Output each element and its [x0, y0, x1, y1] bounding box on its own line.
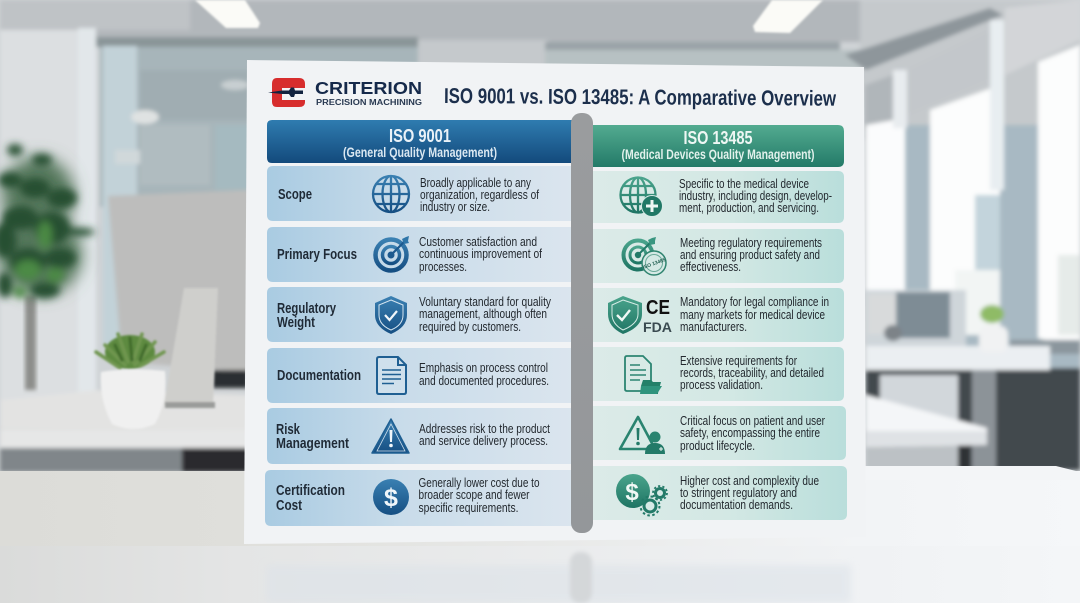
row: Risk Management: [585, 406, 846, 460]
row: Primary Focus: effectiveness.: [680, 260, 741, 274]
row: Documentation: Documentation: [277, 368, 361, 384]
row: Scope: [267, 166, 575, 221]
row: Certification Cost: Higher cost and complexity due: [680, 474, 819, 488]
row: Scope: organization, regardless of: [420, 188, 539, 202]
heading: ISO 9001: [267, 120, 575, 163]
foliage plant: [0, 144, 95, 390]
icon: shield with CE and FDA marks: CE: [646, 297, 670, 319]
icon: shield with check: [375, 296, 407, 334]
row: Scope: Broadly applicable to any: [420, 176, 532, 190]
row: Scope: Specific to the medical device: [679, 177, 809, 191]
row: Regulatory Weight: Regulatory: [277, 301, 336, 317]
row: Scope: industry or size.: [420, 200, 490, 214]
row: Primary Focus: [267, 227, 575, 282]
desk plant and pot: [96, 334, 166, 429]
title: ISO 9001 vs. ISO 13485: A Comparative Overview: [444, 84, 836, 111]
row: Certification Cost: documentation demands.: [680, 498, 793, 512]
panel: ISO 9001 column: [265, 120, 575, 526]
row: Primary Focus: Meeting regulatory requirements: [680, 236, 822, 250]
row: Risk Management: Addresses risk to the product: [419, 422, 550, 436]
icon: warning triangle with person: [620, 417, 665, 454]
heading: ISO 13485: (Medical Devices Quality Management): [622, 147, 814, 162]
heading: ISO 9001: ISO 9001: [389, 126, 451, 146]
icon: shield with CE and FDA marks: [608, 296, 672, 335]
row: Certification Cost: Certification: [276, 483, 345, 499]
row: Regulatory Weight: [585, 288, 844, 342]
row: Certification Cost: Generally lower cost due to: [418, 476, 540, 490]
icon: document with folder: [625, 356, 662, 394]
row: Documentation: records, traceability, and detailed: [680, 366, 824, 380]
row: Documentation: process validation.: [680, 378, 763, 392]
row: Certification Cost: [585, 466, 847, 520]
row: Risk Management: and service delivery process.: [419, 434, 548, 448]
panel: ISO 13485 column: [585, 125, 847, 520]
row: Regulatory Weight: many markets for medical device: [680, 308, 825, 322]
row: Documentation: and documented procedures.: [419, 374, 549, 388]
row: Regulatory Weight: Weight: [277, 315, 315, 331]
row: Risk Management: Critical focus on patient and user: [680, 414, 825, 428]
row: Scope: Scope: [278, 187, 312, 203]
row: Risk Management: Risk: [276, 422, 301, 438]
divider: central grey bar: [571, 113, 593, 533]
row: Scope: [585, 171, 844, 223]
row: Certification Cost: to stringent regulatory and: [680, 486, 797, 500]
icon: dollar coin: $: [384, 484, 398, 512]
monitor stand: [164, 288, 218, 408]
logo: Criterion Precision Machining: CRITERION: [315, 78, 422, 98]
row: Risk Management: Management: [276, 436, 349, 452]
row: Documentation: Emphasis on process control: [419, 361, 548, 375]
row: Documentation: Extensive requirements for: [680, 354, 797, 368]
icon: shield with CE and FDA marks: FDA: [643, 319, 672, 335]
row: Risk Management: safety, encompassing the entire: [680, 426, 820, 440]
row: Certification Cost: Cost: [276, 498, 302, 514]
icon: target with seal: ISO 13485: [642, 257, 667, 271]
icon: dollar coin with gears: $: [625, 479, 639, 506]
logo: Criterion Precision Machining: PRECISION MACHINING: [316, 98, 422, 107]
panel: comparison poster: [244, 60, 866, 544]
row: Regulatory Weight: Voluntary standard for quality: [419, 295, 552, 309]
icon: target with seal: [624, 237, 667, 275]
heading: ISO 13485: ISO 13485: [684, 128, 752, 148]
row: Regulatory Weight: Mandatory for legal compliance in: [680, 295, 829, 309]
row: Primary Focus: Customer satisfaction and: [419, 235, 537, 249]
right side: [860, 0, 1080, 140]
icon: globe: [373, 176, 409, 212]
icon: globe with plus: [620, 178, 662, 216]
row: Regulatory Weight: [267, 287, 575, 342]
row: Risk Management: product lifecycle.: [680, 439, 755, 453]
row: Primary Focus: Primary Focus: [277, 247, 357, 263]
row: Certification Cost: specific requirements.: [418, 501, 518, 515]
heading: ISO 13485: [585, 125, 844, 167]
row: Documentation: [267, 348, 575, 403]
row: Certification Cost: [265, 470, 575, 526]
logo: Criterion Precision Machining: [268, 78, 422, 107]
row: Regulatory Weight: required by customers.: [419, 320, 521, 334]
icon: warning triangle: [372, 419, 409, 453]
icon: dollar coin: [373, 479, 409, 515]
ceiling lights: [195, 0, 823, 33]
heading: ISO 9001: (General Quality Management): [343, 145, 497, 160]
icon: target: [376, 236, 409, 270]
left monitor and desk: [108, 190, 250, 372]
row: Regulatory Weight: manufacturers.: [680, 320, 747, 334]
row: Documentation: [585, 347, 844, 401]
row: Primary Focus: continuous improvement of: [419, 247, 542, 261]
row: Primary Focus: processes.: [419, 260, 467, 274]
poster sheet: [244, 60, 866, 544]
row: Primary Focus: and ensuring product safety and: [680, 248, 820, 262]
foreground table: [0, 466, 1080, 603]
icon: red C mark: [268, 78, 305, 107]
row: Scope: ment, production, and servicing.: [679, 201, 819, 215]
row: Risk Management: [267, 408, 575, 464]
row: Primary Focus: [585, 229, 844, 283]
icon: document: [377, 357, 406, 394]
row: Regulatory Weight: management, although often: [419, 307, 547, 321]
icon: dollar coin with gears: [616, 474, 667, 516]
row: Scope: industry, including design, develop-: [679, 189, 832, 203]
row: Certification Cost: broader scope and fewer: [418, 488, 530, 502]
